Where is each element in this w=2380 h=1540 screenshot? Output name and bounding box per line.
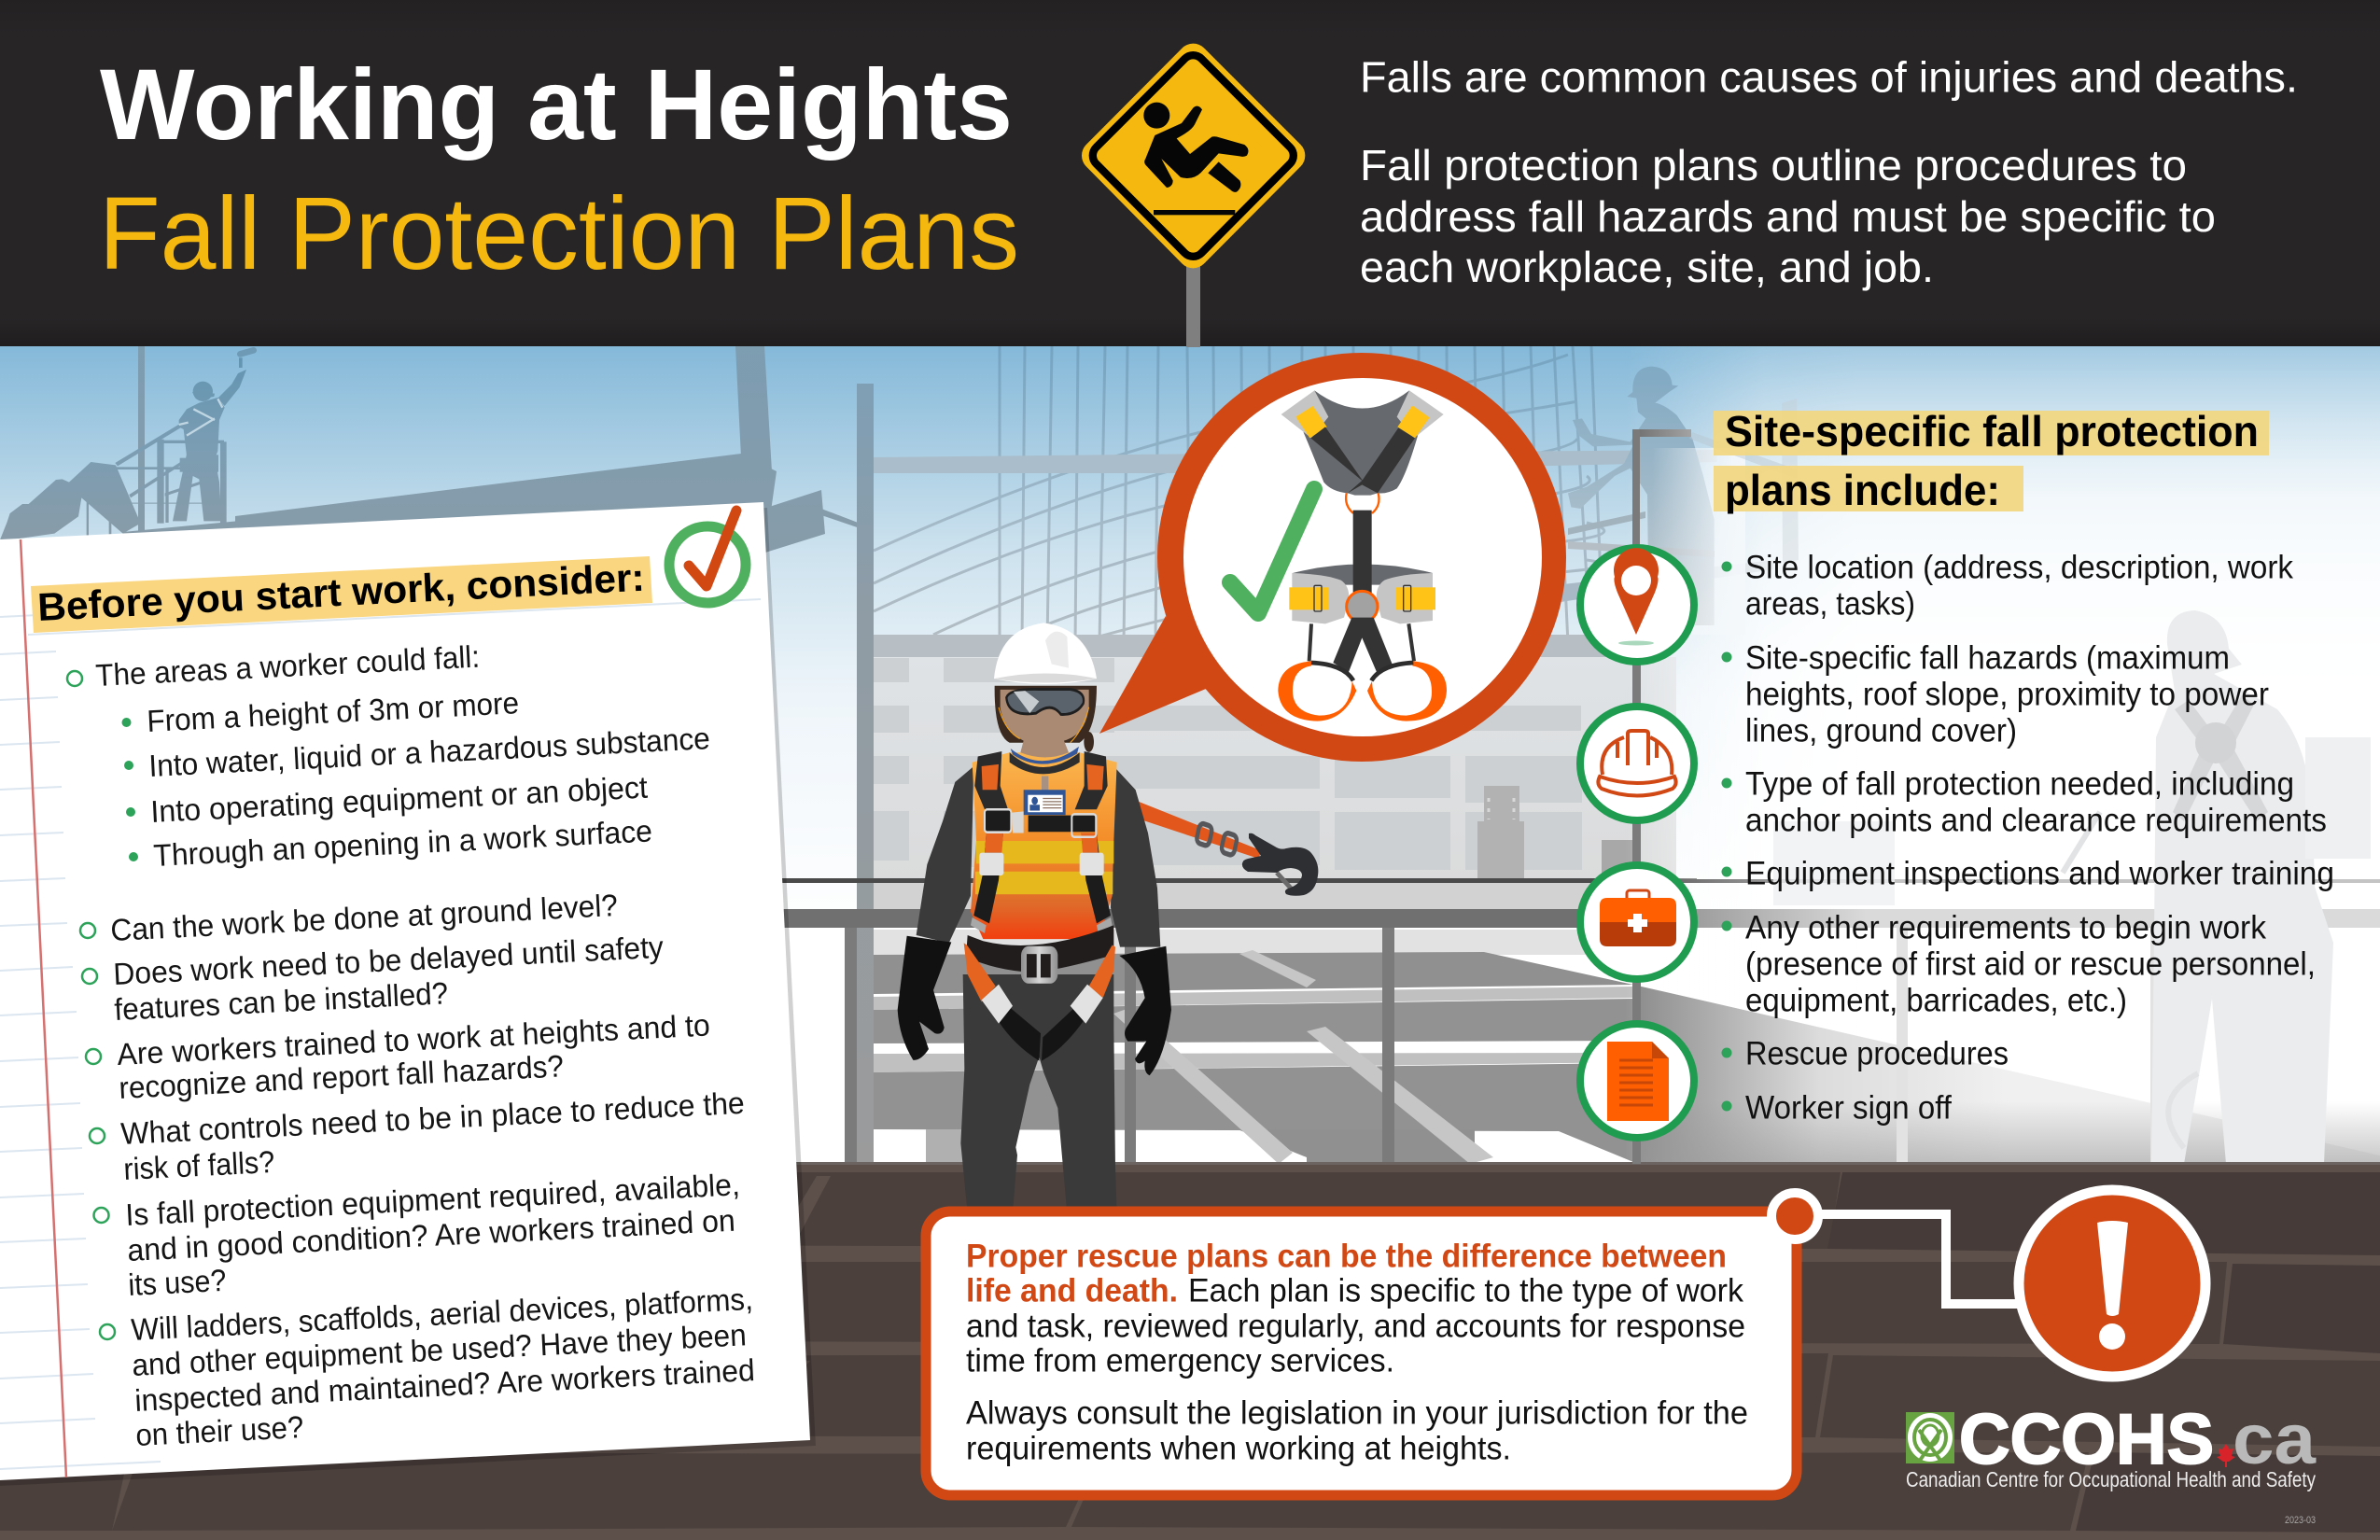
rescue text bbox=[966, 1238, 1748, 1467]
background: deck and railing bbox=[763, 384, 1697, 1167]
checklist text bbox=[95, 639, 756, 1452]
section heading: site-specific plans: plans include: bbox=[1725, 466, 2000, 514]
rescue text: requirements when working at heights. bbox=[966, 1430, 1511, 1467]
paper heading: Before you start work, consider: bbox=[36, 555, 646, 629]
logo emblem bbox=[1906, 1412, 1954, 1463]
checklist text: Does work need to be delayed until safety bbox=[113, 930, 665, 991]
background: upper right worker silhouette bbox=[1568, 367, 1799, 635]
title: Working at Heights bbox=[100, 48, 1013, 161]
waist belt and leg straps bbox=[964, 925, 1115, 1061]
checklist text: risk of falls? bbox=[123, 1144, 275, 1186]
panel: rescue plan callout bbox=[926, 1211, 1797, 1495]
checklist text: and other equipment be used? Have they been bbox=[132, 1317, 748, 1382]
icon: document bbox=[1580, 1024, 1694, 1138]
rescue text: and task, reviewed regularly, and accounts for response bbox=[966, 1309, 1745, 1344]
icon: first aid kit bbox=[1580, 865, 1694, 979]
site-specific list text: Type of fall protection needed, including bbox=[1745, 765, 2294, 803]
background: left silhouette worker and machinery bbox=[0, 346, 873, 560]
checklist text: What controls need to be in place to reduce the bbox=[120, 1085, 746, 1151]
gloves bbox=[898, 936, 1171, 1075]
checklist text: Into water, liquid or a hazardous substance bbox=[148, 721, 711, 783]
CCOHS logo bbox=[1906, 1400, 2317, 1526]
green check mark bbox=[1230, 489, 1314, 613]
site-specific list text: areas, tasks) bbox=[1745, 586, 1915, 622]
rescue text: life and death. bbox=[966, 1273, 1178, 1309]
subtitle: Fall Protection Plans bbox=[99, 176, 1019, 291]
connector from callout to warning icon bbox=[1771, 1193, 2030, 1304]
intro text: Fall protection plans outline procedures to bbox=[1360, 141, 2187, 189]
sky background bbox=[0, 346, 2380, 1168]
site-specific list text: Worker sign off bbox=[1745, 1090, 1952, 1126]
icon: falling hazard sign with pole bbox=[1098, 59, 1290, 347]
site-specific list text: Site location (address, description, work bbox=[1745, 549, 2293, 586]
checklist text: Are workers trained to work at heights and to bbox=[117, 1007, 711, 1071]
checklist text: and in good condition? Are workers trained on bbox=[127, 1203, 736, 1267]
checklist text: Into operating equipment or an object bbox=[150, 770, 649, 829]
site-specific list bullets bbox=[1721, 562, 1732, 1111]
checklist text: inspected and maintained? Are workers trained bbox=[134, 1352, 756, 1418]
section heading highlight: site-specific plans bbox=[1714, 411, 2269, 511]
callout bubble: harness equipment bbox=[1099, 353, 1566, 762]
checklist text: its use? bbox=[128, 1263, 227, 1302]
checklist text: From a height of 3m or more bbox=[147, 685, 520, 738]
site-specific list text: Any other requirements to begin work bbox=[1745, 909, 2266, 946]
logo wordmark: CCOHS bbox=[1959, 1400, 2214, 1479]
rescue text: Each plan is specific to the type of work bbox=[1188, 1273, 1743, 1309]
background: building wall bbox=[874, 657, 1676, 911]
worker illustration wearing fall protection harness bbox=[898, 623, 1262, 1213]
site-specific list text: lines, ground cover) bbox=[1745, 713, 2017, 749]
checklist text: Can the work be done at ground level? bbox=[110, 888, 619, 947]
background: white fade at right side bbox=[1656, 346, 2380, 879]
icon: maple leaf bbox=[2217, 1444, 2235, 1467]
background: faded right worker silhouette bbox=[1773, 610, 2371, 1164]
intro text bbox=[1360, 52, 2298, 291]
intro text: address fall hazards and must be specific to bbox=[1360, 192, 2216, 241]
site-specific list text: equipment, barricades, etc.) bbox=[1745, 982, 2127, 1019]
site-specific list text: Site-specific fall hazards (maximum bbox=[1745, 640, 2230, 676]
ground: brown platform bbox=[0, 1162, 2380, 1540]
harness diagram bbox=[1278, 390, 1447, 721]
site-specific list text: heights, roof slope, proximity to power bbox=[1745, 676, 2269, 713]
date code: 2023-03 bbox=[2285, 1515, 2316, 1526]
checklist text: on their use? bbox=[135, 1409, 304, 1452]
rescue text: Proper rescue plans can be the difference between bbox=[966, 1238, 1727, 1275]
checklist text: Through an opening in a work surface bbox=[153, 813, 653, 873]
head with hard hat and goggles bbox=[994, 623, 1097, 758]
site-specific list text: (presence of first aid or rescue personnel, bbox=[1745, 946, 2316, 982]
checklist text: Will ladders, scaffolds, aerial devices, platforms, bbox=[131, 1281, 754, 1347]
site-specific list text: Rescue procedures bbox=[1745, 1036, 2009, 1071]
checklist text: Is fall protection equipment required, available, bbox=[125, 1167, 741, 1232]
intro text: each workplace, site, and job. bbox=[1360, 243, 1934, 291]
intro text: Falls are common causes of injuries and deaths. bbox=[1360, 52, 2298, 101]
checklist bullets bbox=[67, 671, 138, 1339]
paper heading highlight bbox=[31, 556, 652, 633]
background: upper steel beams bbox=[874, 450, 1773, 657]
rescue text: Always consult the legislation in your jurisdiction for the bbox=[966, 1394, 1748, 1432]
site-specific list text: Equipment inspections and worker training bbox=[1745, 855, 2334, 892]
harness straps and buckles bbox=[971, 751, 1113, 933]
section heading: site-specific plans: Site-specific fall protection bbox=[1725, 407, 2259, 455]
site-specific list text bbox=[1745, 549, 2334, 1126]
checklist text: features can be installed? bbox=[114, 975, 449, 1027]
icon: lanyard snap hook bbox=[1242, 833, 1318, 896]
icon: exclamation warning bbox=[2019, 1190, 2205, 1377]
collar and id badge bbox=[1010, 747, 1080, 815]
background: rope net and scaffolding bbox=[874, 346, 1604, 653]
header band bbox=[0, 0, 2380, 346]
icon: green check mark circle bbox=[669, 511, 746, 603]
logo domain: ca bbox=[2233, 1400, 2317, 1479]
section heading: site-specific plans bbox=[1725, 407, 2259, 514]
rescue text: time from emergency services. bbox=[966, 1342, 1394, 1379]
panel: before you start work notebook page bbox=[0, 502, 816, 1486]
safety vest bbox=[971, 752, 1117, 949]
icon: hard hat bbox=[1580, 707, 1694, 820]
connector bar for icons bbox=[1632, 597, 1641, 1164]
checklist text: The areas a worker could fall: bbox=[95, 639, 481, 693]
background: faded right deck and beams bbox=[1587, 879, 2380, 1164]
lanyard bbox=[1139, 802, 1262, 859]
site-specific list text: anchor points and clearance requirements bbox=[1745, 803, 2327, 838]
worker clothing bbox=[917, 766, 1160, 1213]
icon: location pin bbox=[1580, 548, 1694, 662]
checklist text: recognize and report fall hazards? bbox=[119, 1048, 565, 1105]
